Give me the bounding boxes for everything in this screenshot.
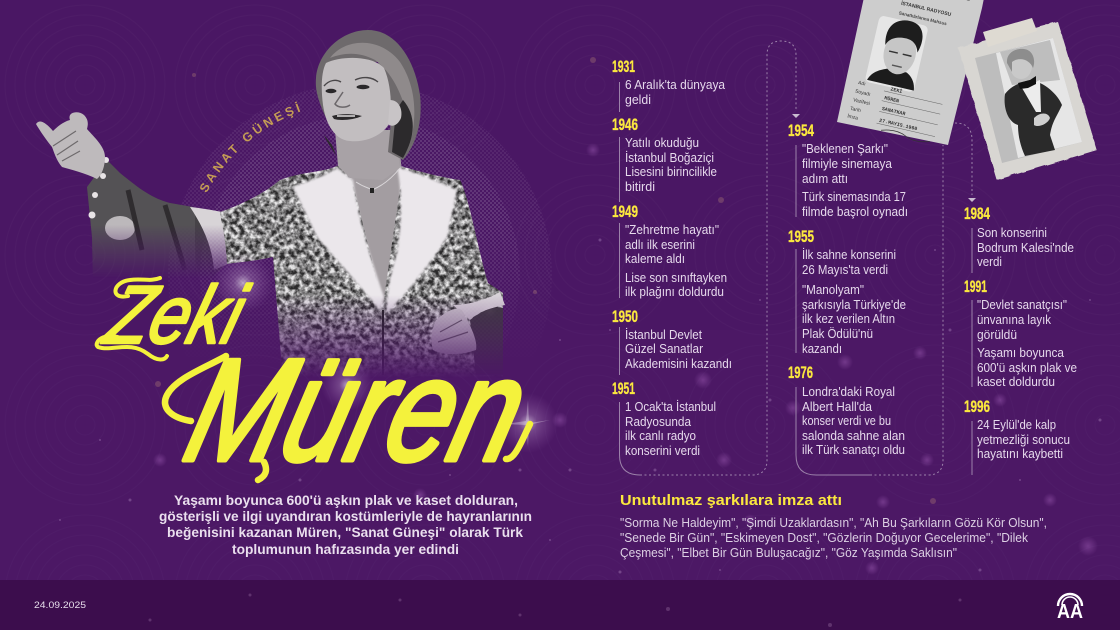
entry 1984: 1984 (964, 204, 990, 223)
photo: radio ID card: Sanatkârlarına Mahsus (898, 10, 948, 26)
card header text: İSTANBUL RADYOSU (900, 0, 952, 18)
entry 1931: 6 Aralık'ta dünyaya (625, 78, 725, 92)
entry 1946: 1946 (612, 115, 638, 134)
entry 1949: "Zehretme hayatı" (625, 223, 719, 237)
timeline column 1 (612, 57, 732, 458)
date: 24.09.2025 (34, 600, 86, 611)
entry 1954: Türk sinemasında 17 (802, 190, 906, 204)
ID fields: Vazifesi (852, 97, 870, 107)
entry 1976: ilk Türk sanatçı oldu (802, 443, 905, 457)
entry 1950: 1950 (612, 307, 638, 326)
entry 1976: Albert Hall'da (802, 400, 872, 414)
entry 1955: kazandı (802, 342, 842, 356)
entry 1991: Yaşamı boyunca (977, 346, 1064, 360)
ID fields: İmza (847, 112, 859, 122)
entry 1949: ilk plağını doldurdu (625, 285, 724, 299)
entry 1951: 1 Ocak'ta İstanbul (625, 400, 716, 414)
title first name: Zeki (95, 269, 257, 361)
entry 1931: 1931 (612, 57, 635, 76)
portrait: face (322, 58, 391, 141)
ID fields (847, 77, 925, 135)
photo: radio ID card (837, 0, 986, 146)
entry 1946 (612, 115, 717, 202)
entry 1955: 26 Mayıs'ta verdi (802, 263, 888, 277)
title decorative swashes (97, 278, 530, 480)
entry 1984: Bodrum Kalesi'nde (977, 241, 1074, 255)
portrait: neck (335, 130, 400, 180)
curved label: Sanat Güneşi: SANAT GÜNEŞİ (200, 102, 300, 192)
tuxedo figure (1005, 49, 1062, 156)
entry 1996: yetmezliği sonucu (977, 433, 1070, 447)
portrait: eyes and brows (324, 78, 378, 86)
tape (983, 18, 1037, 47)
songs list (620, 516, 1047, 560)
entry 1954: adım attı (802, 172, 848, 186)
entry 1991: 600'ü aşkın plak ve (977, 361, 1077, 375)
entry 1976 (788, 363, 905, 457)
portrait: necklace (356, 168, 400, 190)
entry 1955: "Manolyam" (802, 283, 864, 297)
entry 1931: geldi (625, 93, 651, 107)
summary paragraph: Yaşamı boyunca 600'ü aşkın plak ve kaset dolduran, (174, 493, 518, 508)
entry 1949: kaleme aldı (625, 252, 685, 266)
entry 1954 (788, 121, 908, 219)
timeline connectors (620, 41, 976, 475)
entry 1950: Akademisini kazandı (625, 357, 732, 371)
entry 1951: ilk canlı radyo (625, 429, 696, 443)
entry 1950 (612, 307, 732, 375)
entry 1954: "Beklenen Şarkı" (802, 142, 888, 156)
entry 1976: 1976 (788, 363, 813, 382)
songs list: "Sorma Ne Haldeyim", "Şimdi Uzaklardasın", "Ah Bu Şarkıların Gözü Kör Olsun", (620, 516, 1047, 530)
sparkles (213, 253, 558, 453)
entry 1996: 1996 (964, 397, 990, 416)
entry 1991: 1991 (964, 277, 987, 296)
entry 1976: Londra'daki Royal (802, 385, 895, 399)
entry 1954: 1954 (788, 121, 814, 140)
entry 1951: Radyosunda (625, 415, 691, 429)
ID fields: MÜREN (884, 94, 900, 104)
entry 1946: İstanbul Boğaziçi (625, 151, 714, 165)
ID fields: 27.MAYIS.1960 (878, 118, 918, 132)
entry 1955: İlk sahne konserini (802, 248, 896, 262)
entry 1950: Güzel Sanatlar (625, 342, 703, 356)
entry 1991: kaset doldurdu (977, 375, 1055, 389)
ID fields: ZEKİ (890, 85, 903, 95)
portrait: hair (316, 30, 421, 160)
songs list: Çeşmesi", "Elbet Bir Gün Buluşacağız", "Göz Yaşımda Saklısın" (620, 546, 957, 560)
entry 1984: Son konserini (977, 226, 1047, 240)
portrait: raised arm and sleeve (87, 157, 228, 270)
ID fields: Soyadı (854, 89, 871, 98)
entry 1946: Lisesini birincilikle (625, 165, 717, 179)
entry 1949: adlı ilk eserini (625, 238, 695, 252)
entry 1949: Lise son sınıftayken (625, 271, 727, 285)
summary paragraph: gösterişli ve ilgi uyandıran kostümleriyle de hayranlarının (159, 509, 532, 524)
entry 1946: Yatılı okuduğu (625, 136, 699, 150)
entry 1991: "Devlet sanatçısı" (977, 298, 1067, 312)
entry 1984: verdi (977, 255, 1002, 269)
entry 1951: konserini verdi (625, 444, 700, 458)
entry 1951 (612, 379, 716, 458)
portrait: white fur collar right (387, 167, 457, 313)
entry 1955: Plak Ödülü'nü (802, 327, 873, 341)
entry 1949: 1949 (612, 202, 638, 221)
portrait photo of Zeki Müren (36, 30, 510, 390)
entry 1955: 1955 (788, 227, 814, 246)
entry 1955 (788, 227, 906, 356)
ID fields: Adı (857, 80, 866, 88)
entry 1996: 24 Eylül'de kalp (977, 418, 1056, 432)
ID fields: SANATKAR (881, 106, 906, 117)
portrait: raised hand (36, 112, 105, 179)
portrait: right cuff and hand (453, 292, 505, 320)
entry 1931 (612, 57, 725, 112)
entry 1996 (964, 397, 1070, 475)
entry 1955: ilk kez verilen Altın (802, 312, 895, 326)
entry 1996: hayatını kaybetti (977, 447, 1063, 461)
portrait: bare chest (351, 158, 402, 304)
title surname: Müren (172, 329, 543, 491)
ID photo (865, 14, 929, 93)
entry 1951: 1951 (612, 379, 635, 398)
concentric halo rings behind portrait (168, 89, 552, 327)
portrait: brocade coat and sleeve (220, 158, 505, 374)
heading: unforgettable songs: Unutulmaz şarkılara imza attı (620, 492, 842, 509)
entry 1954: filmiyle sinemaya (802, 157, 892, 171)
footer band (0, 580, 1120, 630)
summary paragraph (159, 493, 532, 557)
summary paragraph: beğenisini kazanan Müren, "Sanat Güneşi" olarak Türk (167, 525, 523, 540)
entry 1949 (612, 202, 727, 299)
entry 1976: salonda sahne alan (802, 429, 905, 443)
timeline column 2 (788, 121, 908, 457)
entry 1950: İstanbul Devlet (625, 328, 702, 342)
photo: portrait in tuxedo (958, 18, 1097, 180)
icon: AA logo: AA (1057, 601, 1083, 623)
timeline column 3 (964, 204, 1077, 475)
entry 1984 (964, 204, 1074, 273)
entry 1946: bitirdi (625, 180, 655, 194)
ID fields: Tarih (849, 106, 862, 114)
title: Zeki Müren (95, 269, 543, 491)
summary paragraph: toplumunun hafızasında yer edindi (232, 542, 459, 557)
entry 1976: konser verdi ve bu (802, 414, 891, 428)
entry 1991 (964, 277, 1077, 389)
decorative bokeh particles (59, 57, 1102, 575)
entry 1955: şarkısıyla Türkiye'de (802, 298, 906, 312)
entry 1991: görüldü (977, 328, 1017, 342)
portrait: white fur collar left (293, 168, 384, 310)
portrait: nose (335, 92, 350, 107)
icon: AA logo (1057, 594, 1083, 623)
entry 1991: ünvanına layık (977, 313, 1052, 327)
portrait: mouth (332, 114, 362, 120)
songs list: "Senede Bir Gün", "Eskimeyen Dost", "Gözlerin Doğuyor Gecelerime", "Dilek (620, 531, 1029, 545)
entry 1954: filmde başrol oynadı (802, 205, 908, 219)
